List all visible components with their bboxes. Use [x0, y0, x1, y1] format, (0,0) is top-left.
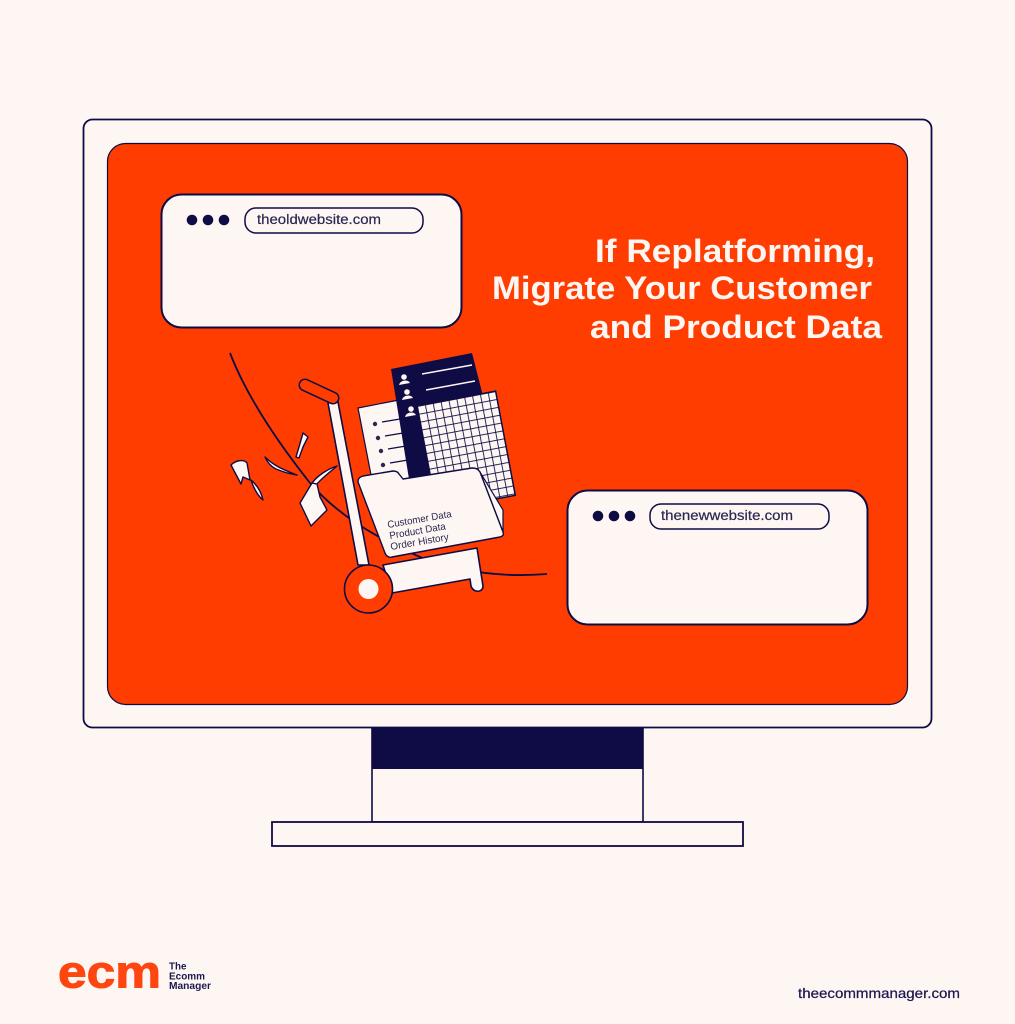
- monitor stand neck: [372, 728, 643, 822]
- folder label: Customer Data: [387, 509, 453, 531]
- data folder: [358, 468, 503, 557]
- website footer: theecommmanager.com: [798, 985, 960, 1001]
- logo tagline: Manager: [169, 981, 211, 992]
- logo wordmark: ecm: [58, 946, 161, 998]
- person icons: [399, 374, 416, 417]
- folder label: Product Data: [389, 521, 447, 542]
- monitor bezel: [84, 120, 932, 728]
- motion trail line: [230, 353, 547, 575]
- url text: theoldwebsite.com: [257, 212, 381, 227]
- folder label: [387, 509, 453, 553]
- logo tagline: Ecomm: [169, 972, 205, 982]
- logo tagline: The: [169, 962, 187, 972]
- list document: [358, 400, 420, 480]
- cart pole: [328, 402, 369, 565]
- title: [492, 233, 882, 345]
- title: If Replatforming,: [595, 233, 875, 269]
- address bar: [245, 208, 423, 233]
- illustration: hand cart carrying data: [230, 353, 547, 613]
- flying paper scraps: [231, 433, 337, 526]
- cart handle: [305, 385, 333, 398]
- url text: thenewwebsite.com: [661, 508, 793, 523]
- monitor stand base: [272, 822, 743, 846]
- orange screen: [108, 144, 908, 704]
- window dots: [187, 215, 229, 225]
- grid spreadsheet: [417, 391, 515, 510]
- cart base: [383, 548, 483, 593]
- monitor: [84, 120, 932, 846]
- browser window: new website: [568, 490, 868, 624]
- folder label: Order History: [390, 532, 450, 553]
- ecm logo: [58, 946, 211, 998]
- browser window: old website: [162, 194, 462, 328]
- logo tagline: [169, 962, 211, 992]
- address bar: [650, 504, 829, 529]
- cart wheel: [344, 565, 392, 613]
- title: and Product Data: [590, 309, 882, 345]
- window dots: [593, 511, 635, 521]
- title: Migrate Your Customer: [492, 270, 872, 306]
- dark customer list sheet: [391, 353, 484, 485]
